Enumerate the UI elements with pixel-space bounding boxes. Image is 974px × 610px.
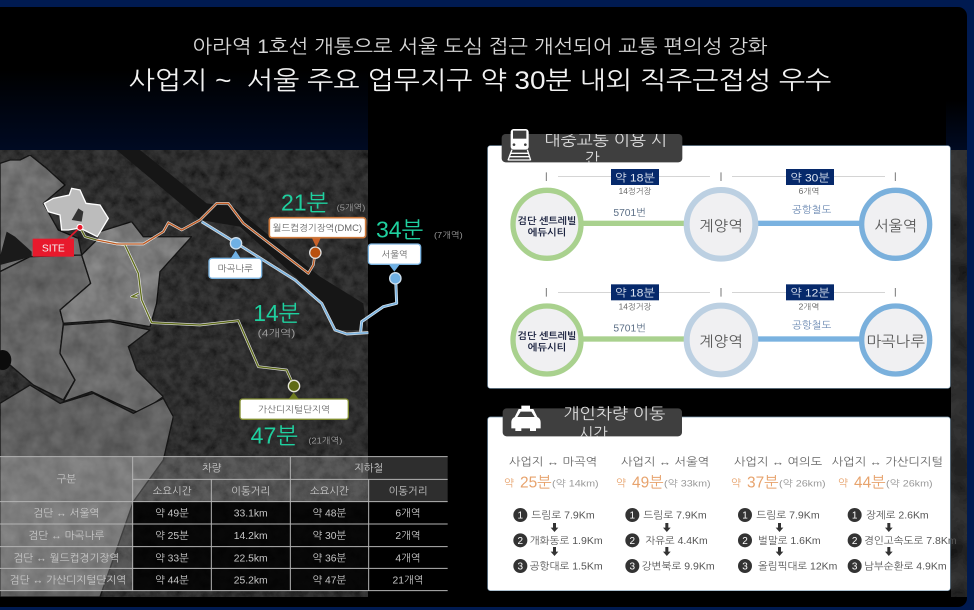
marker: 월드컵경기장역: 월드컵경기장역(DMC) [273, 223, 362, 233]
21분: 21분 [281, 190, 328, 216]
marker: 월드컵경기장역 [269, 218, 366, 258]
row: 가산디지털단지역: 25.2km [234, 575, 268, 586]
row: 서울역: 6개역 [395, 508, 421, 520]
node: 마곡나루: 마곡나루 [866, 333, 925, 350]
steps: 강변북로 9.9Km [642, 561, 715, 573]
han river [117, 150, 367, 330]
table backgrounds [0, 457, 448, 591]
heading: public transit: 대중교통 이용 시 [544, 132, 667, 149]
main heading: 사업지 ~ 서울 주요 업무지구 약 30분 내외 직주근접성 우수 [128, 67, 832, 95]
steps: 드림로 7.9Km [756, 510, 820, 522]
route: blue [202, 222, 397, 334]
connectors: 공항철도 [792, 204, 832, 216]
steps: 공항대로 1.5Km [530, 561, 603, 573]
icon: taxi [511, 406, 541, 431]
marker: 가산디지털단지역 [240, 380, 348, 419]
route column: 서울역: 49분 [632, 474, 664, 491]
row: 서울역: 약 48분 [312, 508, 347, 520]
steps: 1 [518, 511, 524, 522]
marker: 서울역: 서울역 [382, 250, 408, 260]
connectors: 5701번 [613, 323, 646, 335]
route row: 서울역 [513, 169, 930, 259]
land areas [0, 155, 192, 597]
steps: 2 [742, 536, 748, 547]
connectors: 5701번 [613, 207, 646, 219]
steps [513, 508, 603, 573]
heading: public transit: 간 [585, 151, 600, 168]
route row: 마곡나루 [513, 284, 930, 374]
time labels [251, 190, 423, 448]
route column: 마곡역: 약 [504, 478, 514, 490]
route column: 마곡역 [504, 456, 603, 573]
route column: 여의도 [731, 456, 837, 573]
steps: 남부순환로 4.9Km [864, 561, 947, 573]
row: 가산디지털단지역: 약 47분 [312, 574, 347, 586]
row: 월드컵경기장역: 검단 ↔ 월드컵경기장역 [13, 552, 119, 564]
site marker [33, 224, 83, 257]
panel background [488, 417, 950, 591]
header row: 소요시간 [153, 485, 192, 497]
steps: 벌말로 1.6Km [758, 535, 821, 547]
timeline: 약 30분 [790, 172, 830, 184]
marker: 마곡나루 [209, 238, 262, 278]
steps: 1 [852, 511, 858, 522]
steps [848, 508, 957, 573]
row: 서울역: 33.1km [234, 509, 268, 520]
marker: 마곡나루: 마곡나루 [218, 264, 254, 274]
panel: private car [488, 406, 957, 591]
connectors [583, 320, 861, 342]
row: 마곡나루: 14.2km [234, 531, 268, 542]
steps: 드림로 7.9Km [643, 510, 707, 522]
route: olive [80, 227, 293, 385]
node: 계양역 [687, 190, 755, 259]
route column: 여의도: 사업지 ↔ 여의도 [734, 456, 822, 469]
steps: 경인고속도로 7.8Km [864, 535, 957, 547]
node: 검단 센트레빌 에듀시티: 검단 센트레빌 [518, 330, 576, 341]
station counts [258, 203, 463, 446]
marker: 서울역 [368, 244, 421, 284]
station counts: (7개역) [434, 230, 463, 240]
row: 서울역: 검단 ↔ 서울역 [33, 508, 99, 520]
row: 마곡나루 [28, 530, 421, 542]
node: 검단 센트레빌 에듀시티: 에듀시티 [528, 227, 566, 237]
route: orange [97, 203, 315, 273]
marker: 가산디지털단지역: 가산디지털단지역 [258, 405, 330, 415]
steps: 1 [630, 511, 636, 522]
connectors [583, 204, 861, 226]
node: 검단 센트레빌 에듀시티 [513, 190, 581, 258]
table text [10, 463, 427, 586]
timeline: 14정거장 [619, 303, 652, 312]
route column: 여의도: 약 [731, 478, 741, 490]
steps: 3 [518, 562, 524, 573]
subtitle: 아라역 1호선 개통으로 서울 도심 접근 개선되어 교통 편의성 강화 [192, 37, 768, 58]
row: 가산디지털단지역 [10, 574, 423, 586]
row: 마곡나루: 2개역 [395, 530, 421, 542]
row: 월드컵경기장역 [13, 552, 421, 564]
timeline: 약 18분 [615, 172, 655, 184]
steps: 3 [742, 562, 748, 573]
node: 검단 센트레빌 에듀시티: 검단 센트레빌 [518, 215, 576, 226]
timeline: 6개역 [799, 187, 819, 196]
title [128, 37, 832, 95]
route column: 가산디지털: 약 [838, 478, 848, 490]
row: 월드컵경기장역: 4개역 [395, 552, 421, 564]
timeline: 약 12분 [790, 288, 830, 300]
steps: 자유로 4.4Km [645, 535, 708, 547]
row: 월드컵경기장역: 22.5km [234, 553, 268, 564]
row: 월드컵경기장역: 약 36분 [312, 552, 347, 564]
route column: 서울역: 사업지 ↔ 서울역 [621, 456, 709, 469]
timeline [546, 284, 895, 312]
route column: 가산디지털: 사업지 ↔ 가산디지털 [832, 456, 943, 469]
timeline: 14정거장 [619, 187, 652, 196]
row: 마곡나루: 약 30분 [312, 530, 347, 542]
steps: 3 [630, 562, 636, 573]
satellite ground [0, 150, 368, 597]
header row: 구분 [57, 474, 76, 486]
timeline: 2개역 [799, 303, 819, 312]
row: 가산디지털단지역: 약 44분 [155, 574, 189, 586]
header row: 이동거리 [389, 485, 427, 497]
header row: 차량 [202, 463, 222, 475]
site outline [44, 188, 108, 237]
site marker: SITE [42, 243, 65, 254]
heading: private car: 개인차량 이동 [563, 406, 666, 423]
47분: 47분 [251, 422, 298, 448]
node: 계양역 [687, 306, 755, 374]
route column: 여의도: 37분 [747, 474, 779, 491]
connectors: 공항철도 [792, 320, 832, 332]
route column: 가산디지털: (약 26km) [886, 479, 933, 489]
route column: 마곡역: (약 14km) [552, 479, 599, 489]
header row: 이동거리 [231, 485, 270, 497]
node: 계양역: 계양역 [699, 218, 743, 235]
icon: train [508, 129, 531, 160]
route column: 서울역 [616, 456, 715, 573]
route column: 마곡역: 25분 [520, 474, 552, 491]
steps: 장제로 2.6Km [866, 510, 929, 522]
steps: 1 [742, 511, 748, 522]
steps: 드림로 7.9Km [531, 510, 595, 522]
panel background [488, 146, 950, 388]
node: 서울역: 서울역 [874, 218, 917, 235]
heading: public transit [502, 134, 682, 162]
steps: 개화동로 1.9Km [530, 535, 603, 547]
panel: public transit [488, 129, 950, 388]
route column: 마곡역: 사업지 ↔ 마곡역 [509, 456, 597, 469]
header row: 지하철 [354, 463, 383, 475]
route column: 서울역: (약 33km) [664, 479, 711, 489]
row: 서울역: 약 49분 [155, 508, 189, 520]
node: 검단 센트레빌 에듀시티 [513, 306, 581, 374]
row: 가산디지털단지역: 21개역 [393, 574, 423, 586]
data table [0, 457, 448, 591]
node: 계양역: 계양역 [699, 333, 743, 350]
route column: 가산디지털 [832, 456, 957, 573]
timeline: 약 18분 [615, 288, 655, 300]
steps: 2 [518, 536, 524, 547]
steps: 3 [852, 562, 858, 573]
station counts: (4개역) [258, 328, 295, 340]
route column: 가산디지털: 44분 [854, 474, 886, 491]
row: 서울역 [33, 508, 421, 520]
station counts: (5개역) [337, 203, 365, 213]
34분: 34분 [376, 217, 423, 243]
timeline [546, 169, 895, 196]
row: 가산디지털단지역: 검단 ↔ 가산디지털단지역 [10, 574, 126, 586]
row: 마곡나루: 약 25분 [155, 530, 189, 542]
heading: private car: 시간 [579, 426, 608, 443]
steps [738, 508, 837, 573]
header row [57, 463, 427, 497]
row: 마곡나루: 검단 ↔ 마곡나루 [28, 530, 105, 542]
node: 서울역 [862, 190, 930, 258]
heading: private car [502, 406, 682, 436]
steps [625, 508, 715, 573]
14분: 14분 [253, 300, 300, 326]
node: 검단 센트레빌 에듀시티: 에듀시티 [528, 342, 566, 352]
route column: 여의도: (약 26km) [779, 479, 826, 489]
route column: 서울역: 약 [616, 478, 626, 490]
steps: 2 [852, 536, 858, 547]
header row: 소요시간 [310, 485, 349, 497]
station counts: (21개역) [308, 436, 342, 446]
map panel [0, 150, 463, 597]
node: 마곡나루 [862, 306, 930, 374]
row: 월드컵경기장역: 약 33분 [155, 552, 189, 564]
steps: 올림픽대로 12Km [758, 561, 837, 573]
steps: 2 [630, 536, 636, 547]
